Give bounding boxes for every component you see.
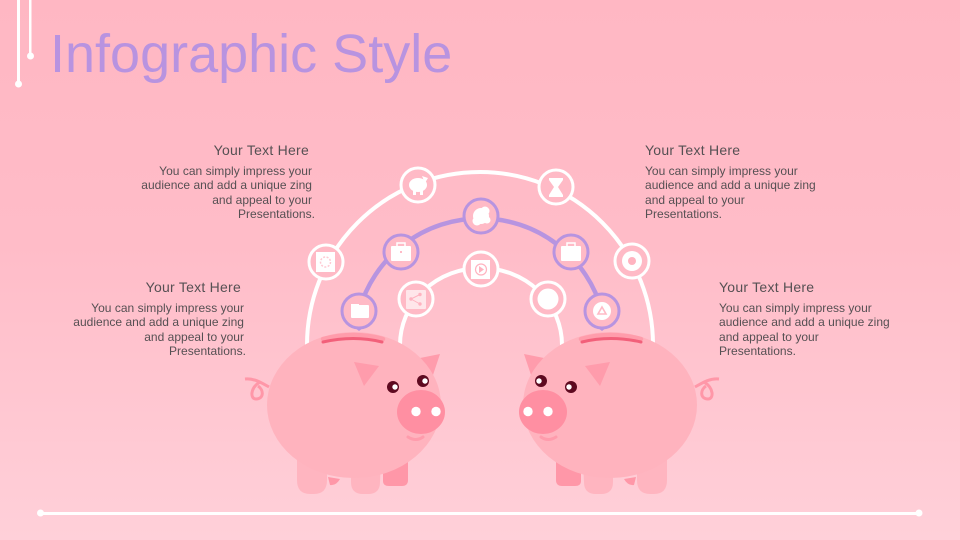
- text block: top right: You can simply impress your: [645, 164, 798, 178]
- text block: lower left: You can simply impress your: [91, 301, 244, 315]
- text block: lower left: audience and add a unique zing: [73, 315, 244, 329]
- text block: top right: [645, 142, 816, 221]
- outer white arc: [307, 172, 653, 345]
- node: right briefcase icon: [554, 235, 588, 269]
- piggy bank: right: [519, 332, 719, 494]
- text block: lower right: Presentations.: [719, 344, 796, 358]
- node: folder icon: [342, 294, 376, 331]
- snout: [397, 390, 445, 434]
- text block: top right: and appeal to your: [645, 193, 745, 207]
- eyes: [387, 375, 429, 393]
- text block: top left: Presentations.: [238, 207, 315, 221]
- node: solid circle icon: [531, 282, 565, 316]
- node: leaf icon: [464, 199, 498, 233]
- node: framed dial icon: [309, 245, 343, 279]
- node: piggy icon: [401, 168, 435, 202]
- far ear: [420, 354, 440, 375]
- text block: lower right: Your Text Here: [719, 279, 814, 295]
- near legs: [297, 450, 381, 494]
- text block: lower right: and appeal to your: [719, 330, 819, 344]
- text block: lower right: [719, 279, 890, 358]
- title: Infographic Style: [50, 24, 452, 84]
- node: recycle icon: [585, 294, 619, 331]
- text block: top right: Presentations.: [645, 207, 722, 221]
- coin slot: [323, 335, 383, 342]
- text block: lower left: and appeal to your: [144, 330, 244, 344]
- near ear: [354, 362, 379, 386]
- text block: top left: [141, 142, 315, 221]
- text block: lower right: You can simply impress your: [719, 301, 872, 315]
- text block: top left: audience and add a unique zing: [141, 178, 312, 192]
- text block: lower left: Your Text Here: [146, 279, 241, 295]
- text block: top left: and appeal to your: [212, 193, 312, 207]
- tail: [245, 379, 269, 399]
- middle purple arc: [359, 218, 602, 311]
- text block: lower right: audience and add a unique zing: [719, 315, 890, 329]
- smile: [408, 437, 423, 440]
- inner white arc: [400, 268, 562, 345]
- node: hourglass icon: [539, 170, 573, 204]
- node: ring icon: [615, 244, 649, 278]
- far legs: [328, 461, 408, 486]
- node: share icon: [399, 282, 433, 316]
- piggy bank: left: [245, 332, 445, 494]
- text block: top left: You can simply impress your: [159, 164, 312, 178]
- text block: top left: Your Text Here: [214, 142, 309, 158]
- node: left briefcase icon: [384, 235, 418, 269]
- text block: lower left: Presentations.: [169, 344, 246, 358]
- node: play icon: [464, 252, 498, 286]
- text block: lower left: [73, 279, 246, 358]
- body: [267, 332, 441, 478]
- text block: top right: Your Text Here: [645, 142, 740, 158]
- text block: top right: audience and add a unique zing: [645, 178, 816, 192]
